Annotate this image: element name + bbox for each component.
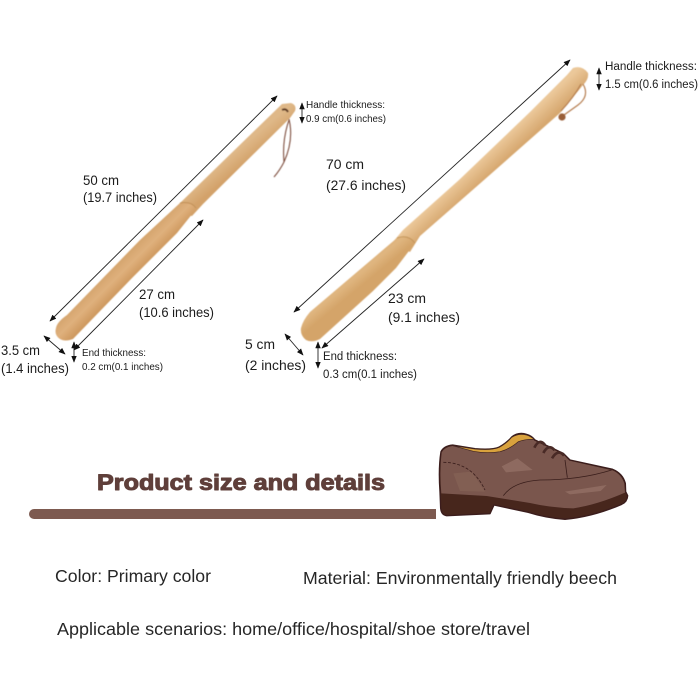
label: handle thickness: Handle thickness: — [306, 100, 385, 111]
label: handle thickness: 1.5 cm(0.6 inches) — [605, 79, 698, 91]
label: end thickness: End thickness: — [323, 351, 397, 363]
label: 50 cm: 50 cm — [83, 172, 119, 188]
arrow: 70 cm length — [294, 60, 570, 312]
label: 5 cm: (2 inches) — [245, 357, 306, 373]
label: 27 cm: 27 cm — [139, 286, 175, 302]
label: handle thickness: Handle thickness: — [605, 61, 697, 73]
label: handle thickness — [605, 61, 698, 91]
label: 5 cm: 5 cm — [245, 336, 275, 352]
label: handle thickness — [306, 100, 386, 125]
label: 27 cm — [139, 286, 214, 320]
panel: 70 cm shoehorn — [245, 60, 698, 381]
label: 50 cm: (19.7 inches) — [83, 189, 157, 205]
arrow: 5 cm width — [285, 334, 303, 355]
arrow: end thickness — [73, 342, 75, 362]
label: 23 cm — [388, 290, 460, 325]
label: 70 cm: 70 cm — [326, 156, 364, 172]
label: 50 cm — [83, 172, 157, 205]
label: 3.5 cm: (1.4 inches) — [1, 360, 69, 376]
label: end thickness: 0.3 cm(0.1 inches) — [323, 369, 417, 381]
text: applicable scenarios: Applicable scenarios: home/office/hospital/shoe store/travel — [57, 619, 530, 639]
label: 70 cm — [326, 156, 406, 193]
label: end thickness — [323, 351, 417, 381]
arrow: 3.5 cm width — [44, 336, 65, 354]
text: color: Color: Primary color — [55, 566, 211, 586]
shoehorn: short wooden body — [56, 103, 296, 340]
label: end thickness: 0.2 cm(0.1 inches) — [82, 362, 163, 373]
label: handle thickness: 0.9 cm(0.6 inches) — [306, 114, 386, 125]
label: 3.5 cm — [1, 342, 69, 376]
arrow: 50 cm length — [50, 96, 277, 321]
arrow: 27 cm scoop length — [74, 220, 203, 350]
arrow: 23 cm scoop length — [322, 259, 424, 348]
panel: 50 cm shoehorn — [1, 96, 386, 376]
label: 3.5 cm: 3.5 cm — [1, 342, 40, 358]
label: 23 cm: (9.1 inches) — [388, 309, 460, 325]
icon: brown shoe — [439, 433, 628, 519]
label: 23 cm: 23 cm — [388, 290, 426, 306]
label: 27 cm: (10.6 inches) — [139, 304, 214, 320]
heading: product size and details: Product size and details — [97, 470, 385, 495]
divider bar — [29, 509, 436, 519]
label: 5 cm — [245, 336, 306, 373]
label: end thickness: End thickness: — [82, 348, 146, 359]
arrow: handle thickness — [301, 103, 303, 123]
label: end thickness — [82, 348, 163, 373]
shoehorn: long wooden body — [301, 67, 588, 341]
arrow: handle thickness — [598, 68, 600, 90]
text: material: Material: Environmentally friendly beech — [303, 568, 617, 588]
arrow: end thickness — [317, 342, 319, 368]
label: 70 cm: (27.6 inches) — [326, 177, 406, 193]
